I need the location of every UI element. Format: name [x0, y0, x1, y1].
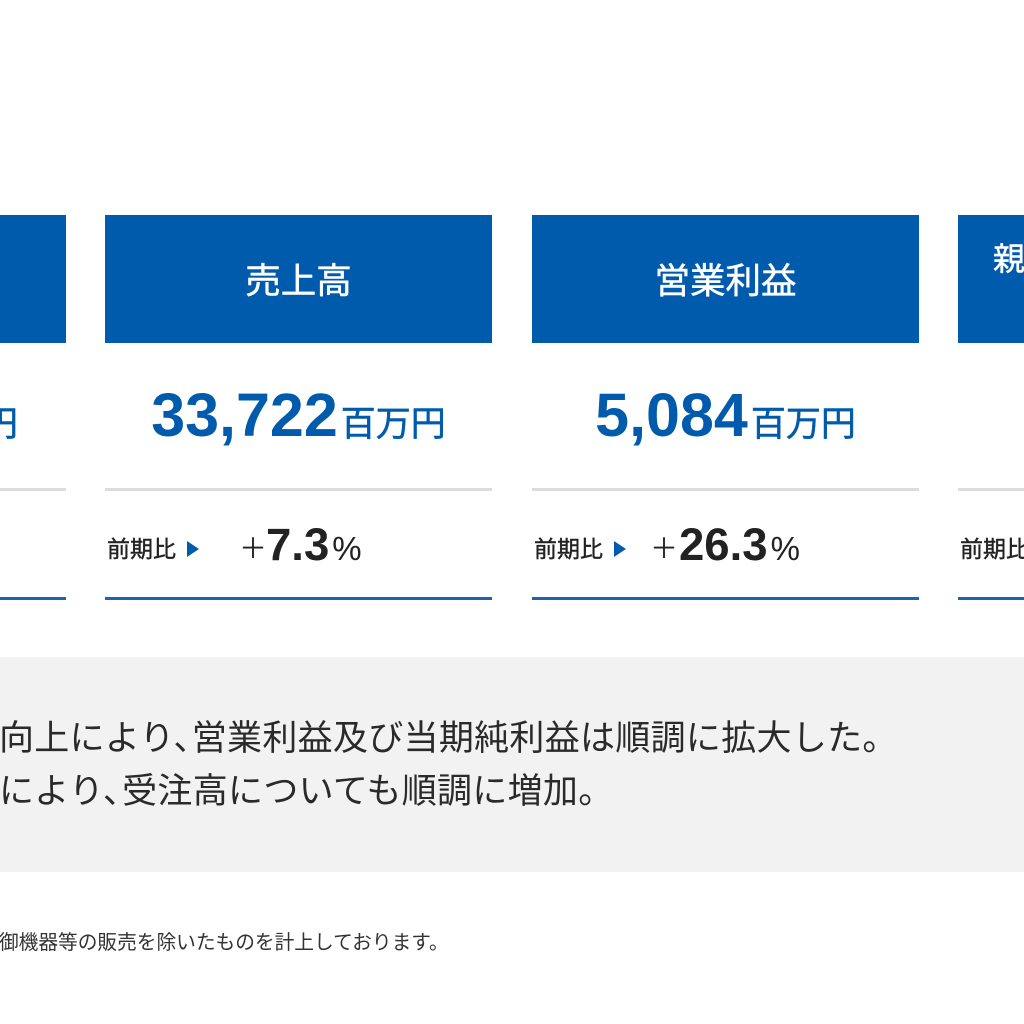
heading: operating profit [532, 215, 919, 343]
footnote: 御機器等の販売を除いたものを計上しております。 [0, 932, 449, 954]
label: year on year: 前期比 [107, 536, 176, 562]
change sign: operating profit: ＋ [650, 533, 678, 564]
panel: net sales card [105, 215, 492, 600]
panel: summary [0, 657, 1024, 872]
heading: net sales: 売上高 [245, 261, 352, 301]
label: year on year: 前期比 [534, 536, 603, 562]
value: operating profit: 5,084百万円 [595, 381, 856, 449]
heading: clipped net income [958, 215, 1024, 343]
change value: operating profit: 26.3% [679, 519, 800, 570]
change sign: net sales: ＋ [239, 533, 267, 564]
value: net sales: 33,722百万円 [151, 381, 446, 449]
heading: operating profit: 営業利益 [654, 261, 796, 301]
panel: clipped left card [0, 215, 66, 600]
heading: net sales [105, 215, 492, 343]
panel: operating profit card [532, 215, 919, 600]
clipped card heading bar [0, 215, 66, 343]
text: summary line 2: により、受注高についても順調に増加。 [0, 772, 614, 811]
icon: triangle arrow [187, 541, 199, 557]
change value: net sales: 7.3% [266, 519, 362, 570]
panel: clipped right card [958, 215, 1024, 600]
icon: triangle arrow [614, 541, 626, 557]
text: summary line 1: 向上により、営業利益及び当期純利益は順調に拡大した。 [0, 719, 898, 758]
